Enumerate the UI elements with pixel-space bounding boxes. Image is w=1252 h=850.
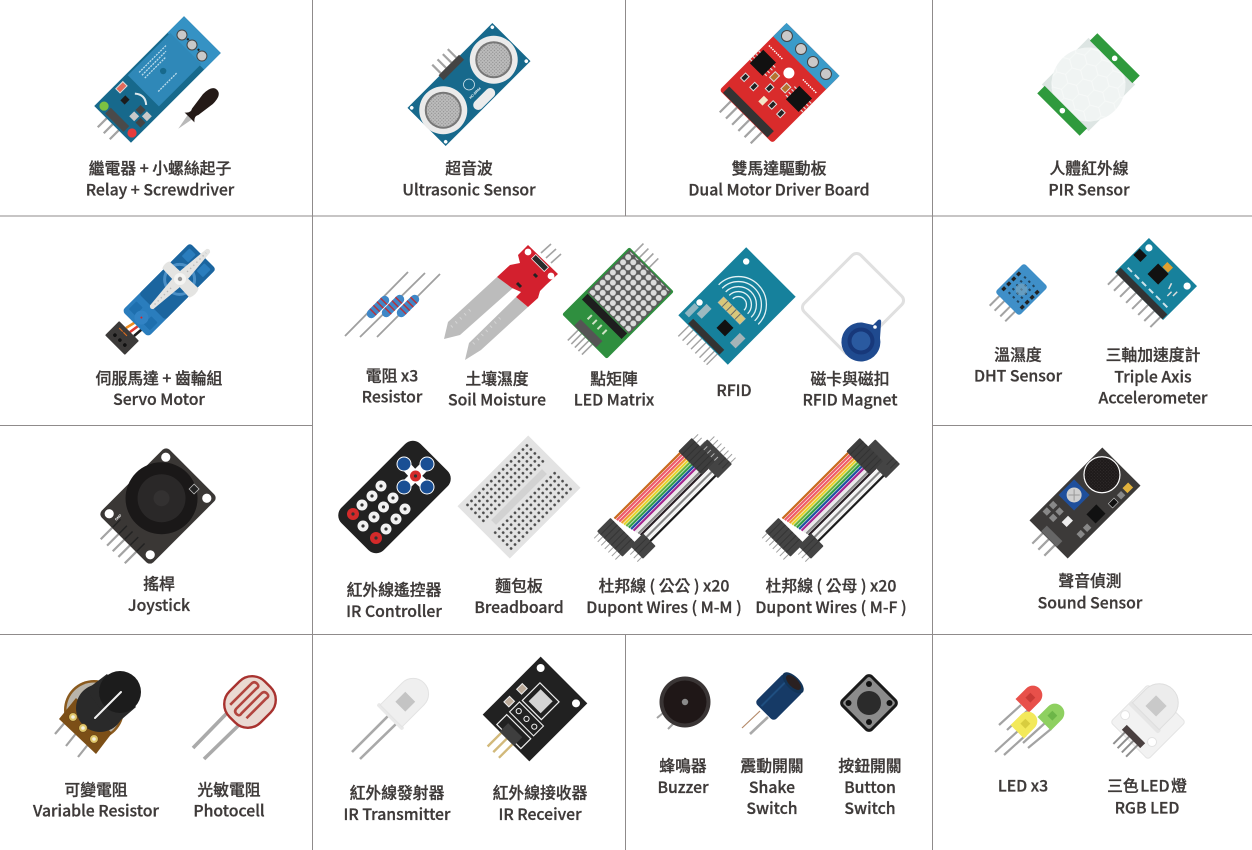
icon: servo connector: [105, 321, 139, 355]
panel: central kit: [334, 238, 907, 622]
label: ultrasonic english: Ultrasonic Sensor: [402, 178, 536, 200]
label: relay english: Relay + Screwdriver: [86, 178, 235, 200]
label: LED matrix: 點矩陣: [590, 366, 638, 390]
label: variable resistor english: Variable Resistor: [32, 798, 159, 822]
label: IR transmitter english: IR Transmitter: [344, 802, 451, 825]
icon: ultrasonic sensor: [398, 14, 531, 146]
label: motor driver english: Dual Motor Driver Board: [688, 178, 870, 200]
panel: LEDs: [995, 674, 1188, 818]
label: RFID: RFID: [716, 378, 752, 401]
icon: servo wires: [126, 318, 148, 336]
panel: relay and screwdriver: [85, 16, 235, 200]
label: dupont male-female english: Dupont Wires ( M-F ): [755, 595, 907, 618]
label: DHT: 溫濕度: [994, 342, 1042, 366]
icon: motor driver board: [708, 23, 840, 154]
icon: ultrasonic sensor: HC-SR04: [469, 87, 482, 100]
label: soil moisture: 土壤濕度: [465, 366, 529, 390]
icon: RFID card: [800, 251, 906, 357]
label: soil moisture english: Soil Moisture: [448, 388, 546, 410]
icon: servo horn: [136, 235, 225, 324]
icon: buzzer: [657, 676, 710, 729]
icon: resistors: [345, 272, 440, 337]
icon: LEDs: [995, 682, 1068, 755]
icon: RFID reader: [668, 247, 796, 375]
panel: IR transmitter and receiver: [344, 657, 588, 825]
panel: dual motor driver: [688, 23, 870, 200]
icon: IR remote: [334, 436, 455, 558]
icon: soil moisture sensor: [444, 244, 561, 360]
label: accelerometer line 2: Triple Axis: [1114, 364, 1192, 388]
icon: LED matrix: [552, 238, 683, 369]
icon: IR receiver: [469, 657, 587, 775]
icon: RFID key fob: [841, 320, 881, 361]
label: breadboard: 麵包板: [495, 574, 543, 596]
label: RFID magnet: 磁卡與磁扣: [810, 366, 890, 390]
label: shake switch line 2: Shake: [749, 775, 795, 798]
label: variable resistor: 可變電阻: [64, 778, 128, 800]
label: dupont male-male english: Dupont Wires ( M-M ): [586, 595, 742, 618]
label: servo english: Servo Motor: [113, 387, 205, 410]
label: IR controller english: IR Controller: [346, 599, 442, 622]
label: LED: LED x3: [998, 774, 1048, 796]
icon: servo body: [122, 243, 216, 337]
icon: triple axis accelerometer: [1105, 238, 1197, 330]
panel: ultrasonic: [398, 14, 536, 200]
label: buzzer english: Buzzer: [657, 775, 709, 798]
label: button switch line 2: Button: [844, 775, 896, 798]
label: button switch: 按鈕開關: [838, 754, 902, 776]
panel: variable resistor and photocell: [32, 669, 283, 822]
label: IR controller: 紅外線遙控器: [347, 578, 442, 600]
label: motor driver: 雙馬達驅動板: [732, 156, 827, 179]
label: RGB LED: 三色 LED 燈: [1107, 774, 1187, 796]
icon: potentiometer: [55, 671, 141, 757]
panel: servo: [96, 235, 225, 410]
label: resistor: 電阻 x3: [366, 364, 418, 386]
label: accelerometer: 三軸加速度計: [1106, 342, 1201, 366]
label: sound sensor english: Sound Sensor: [1038, 590, 1143, 614]
label: photocell: 光敏電阻: [197, 778, 261, 800]
label: photocell english: Photocell: [193, 798, 265, 822]
icon: DHT sensor: [985, 263, 1048, 326]
label: IR receiver english: IR Receiver: [498, 802, 582, 825]
icon: joystick: GND: [114, 513, 123, 522]
label: shake switch line 3: Switch: [746, 796, 798, 819]
panel: buzzer and switches: [657, 669, 902, 819]
label: shake switch: 震動開關: [740, 754, 804, 776]
icon: dupont wires male-male: [592, 425, 740, 573]
icon: joystick: [85, 444, 218, 577]
icon: dupont wires male-female: [760, 430, 903, 573]
label: LED matrix english: LED Matrix: [574, 388, 655, 410]
label: dupont male-male: 杜邦線 ( 公公 ) x20: [599, 574, 729, 596]
label: resistor english: Resistor: [362, 384, 423, 408]
label: servo: 伺服馬達 + 齒輪組: [96, 366, 223, 389]
label: joystick: 搖桿: [143, 572, 175, 594]
panel: joystick: [85, 444, 218, 616]
label: breadboard english: Breadboard: [474, 595, 564, 618]
label: RFID magnet english: RFID Magnet: [802, 388, 898, 410]
icon: shake switch: [742, 669, 807, 734]
label: sound sensor: 聲音偵測: [1058, 568, 1122, 592]
label: joystick english: Joystick: [128, 593, 190, 616]
label: button switch line 3: Switch: [844, 796, 896, 819]
icon: RGB LED: [1101, 674, 1188, 769]
label: IR transmitter: 紅外線發射器: [350, 780, 445, 804]
icon: screwdriver: [173, 85, 222, 134]
label: IR receiver: 紅外線接收器: [493, 780, 588, 804]
label: RGB LED english: RGB LED: [1115, 796, 1179, 818]
icon: breadboard: [457, 435, 581, 559]
icon: push button: [840, 674, 898, 732]
panel: DHT and accelerometer: [974, 238, 1208, 408]
label: relay: 繼電器 + 小螺絲起子: [89, 156, 231, 179]
icon: photocell: [193, 669, 283, 759]
label: dupont male-female: 杜邦線 ( 公母 ) x20: [766, 574, 896, 596]
panel: sound sensor: [1019, 447, 1143, 614]
label: buzzer: 蜂鳴器: [659, 754, 707, 776]
label: accelerometer line 3: Accelerometer: [1099, 386, 1208, 408]
label: PIR english: PIR Sensor: [1048, 178, 1130, 200]
icon: PIR sensor: [1032, 28, 1145, 141]
panel: PIR: [1032, 28, 1145, 201]
label: DHT english: DHT Sensor: [974, 364, 1063, 386]
label: ultrasonic: 超音波: [445, 156, 493, 179]
icon: relay board: [85, 16, 221, 152]
label: PIR: 人體紅外線: [1050, 156, 1129, 179]
icon: IR transmitter: [352, 670, 437, 759]
icon: sound sensor: [1019, 447, 1141, 569]
